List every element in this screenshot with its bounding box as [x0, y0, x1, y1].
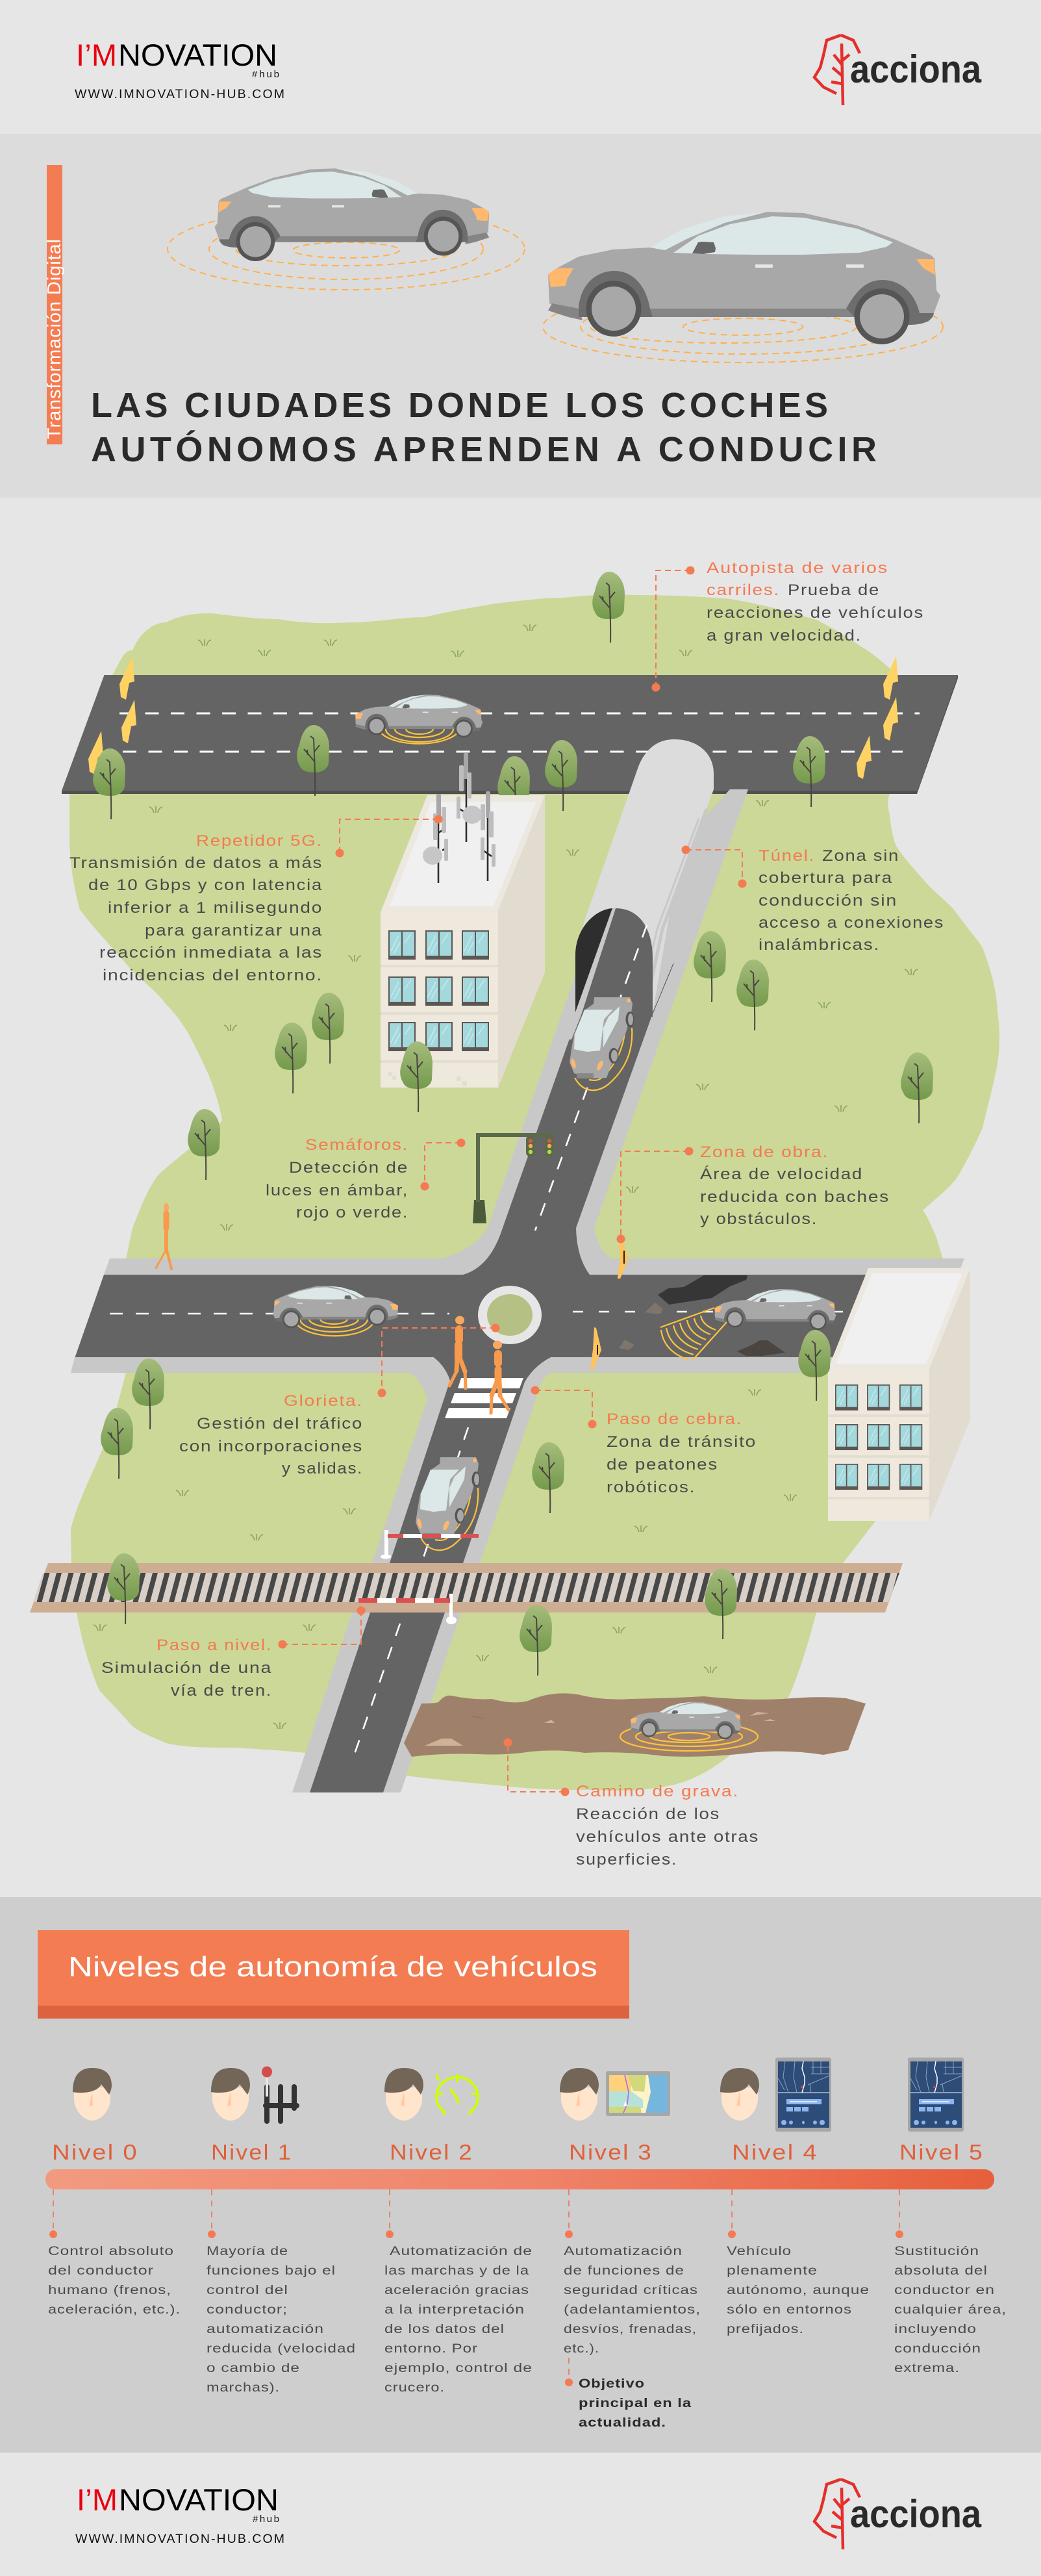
grass tufts	[94, 624, 918, 1729]
roundabout	[478, 1286, 542, 1344]
railway level crossing track	[30, 1563, 903, 1613]
text: level 3: (adelantamientos,	[564, 2303, 701, 2317]
asphalt of crossroad	[75, 908, 909, 1563]
traffic light	[473, 1133, 555, 1223]
callout: gravel road	[504, 1739, 759, 1868]
callout: roundabout: Glorieta.	[284, 1392, 363, 1410]
category tag: Transformación Digital	[44, 239, 65, 439]
icon: level 3 face and map tablet	[560, 2068, 670, 2121]
logo: acciona footer: acciona	[850, 2492, 982, 2536]
road works: pothole and rocks	[619, 1275, 785, 1356]
callout: road works	[617, 1143, 890, 1243]
text: level 5: incluyendo	[894, 2323, 977, 2336]
callout: motorway: Autopista de varios	[707, 559, 888, 577]
callout: gravel road: superficies.	[576, 1851, 677, 1868]
text: level 5: absoluta del	[894, 2264, 988, 2278]
logo: I'MNOVATION header	[75, 38, 284, 101]
building with 5G repeater	[381, 795, 545, 1088]
logo: I'MNOVATION header: I’M	[76, 38, 117, 72]
multi-lane motorway	[62, 675, 958, 794]
callout: zebra crossing: de peatones	[607, 1456, 718, 1473]
callout: road works: Zona de obra.	[700, 1143, 829, 1161]
text: level 3: seguridad críticas	[564, 2284, 698, 2297]
text: level 1: control del	[207, 2284, 288, 2297]
section heading: autonomy levels: Niveles de autonomía de vehículos	[68, 1951, 597, 1983]
callout: road works: reducida con baches	[700, 1188, 890, 1206]
callout: tunnel: Túnel.	[759, 847, 815, 865]
callout: traffic lights: luces en ámbar,	[266, 1182, 408, 1199]
callout: level crossing	[101, 1606, 365, 1700]
text: level 4: Vehículo	[727, 2245, 792, 2258]
text: level 2: aceleración gracias	[384, 2284, 529, 2297]
level labels	[52, 2140, 984, 2164]
map section background	[0, 498, 1041, 1897]
callout: tunnel: inalámbricas.	[759, 936, 880, 954]
callout: zebra crossing	[531, 1386, 757, 1496]
callout: roundabout: Gestión del tráfico	[197, 1415, 363, 1433]
motorway car	[355, 695, 483, 738]
barrier top	[381, 1530, 479, 1559]
text: level 1: reducida (velocidad	[207, 2342, 356, 2356]
callout: motorway	[652, 559, 924, 691]
text: level 0: Control absoluto	[48, 2245, 174, 2258]
callout: motorway: Prueba de	[788, 581, 880, 599]
text: level 3	[564, 2245, 701, 2430]
text: level 0: del conductor	[48, 2264, 154, 2278]
logo: acciona footer	[814, 2479, 982, 2549]
callout: motorway: carriles.	[707, 581, 780, 599]
logo: I'MNOVATION footer: NOVATION	[119, 2482, 279, 2517]
title	[91, 386, 877, 469]
level labels: Nivel 5	[899, 2140, 984, 2164]
text: level 1: Mayoría de	[207, 2245, 288, 2258]
text: level 5: cualquier área,	[894, 2303, 1007, 2317]
text: level 3: actualidad.	[579, 2416, 666, 2430]
callout: level crossing: Paso a nivel.	[157, 1637, 272, 1654]
text: level 4: autónomo, aunque	[727, 2284, 870, 2297]
callout: 5G repeater	[69, 815, 443, 984]
callout: roundabout: con incorporaciones	[179, 1438, 363, 1455]
logo: I'MNOVATION header: WWW.IMNOVATION-HUB.COM	[75, 87, 284, 101]
level labels: Nivel 3	[569, 2140, 653, 2164]
logo: I'MNOVATION header: NOVATION	[118, 38, 277, 72]
callout: gravel road: Camino de grava.	[576, 1783, 739, 1800]
callout: tunnel: acceso a conexiones	[759, 914, 944, 932]
callout: 5G repeater: Repetidor 5G.	[196, 832, 323, 850]
header band	[0, 0, 1041, 134]
text: level 1: conductor;	[207, 2303, 288, 2317]
callout: roundabout	[179, 1324, 500, 1477]
text: level 2: a la interpretación	[384, 2303, 525, 2317]
car approaching crossing	[416, 1457, 481, 1550]
logo: I'MNOVATION footer	[75, 2482, 284, 2546]
car in tunnel	[570, 997, 634, 1090]
logo: acciona header: acciona	[850, 47, 982, 91]
lower road after crossing	[292, 1613, 461, 1792]
callout: tunnel	[682, 846, 944, 954]
level connectors	[49, 2189, 903, 2386]
callout: traffic lights: rojo o verde.	[296, 1204, 408, 1221]
text: level 2: Automatización de	[390, 2245, 533, 2258]
icon: level 0 face	[73, 2068, 112, 2121]
text: level 0: aceleración, etc.).	[48, 2303, 181, 2317]
callout: gravel road: Reacción de los	[576, 1805, 720, 1823]
tunnel	[558, 739, 714, 1039]
callout: traffic lights: Detección de	[289, 1159, 408, 1177]
callout: roundabout: y salidas.	[282, 1460, 363, 1477]
zebra crossing	[445, 1378, 523, 1418]
text: level 5: conductor en	[894, 2284, 995, 2297]
text: level 2: de los datos del	[384, 2323, 505, 2336]
text: level 0	[48, 2245, 181, 2317]
logo: acciona header	[814, 35, 982, 105]
text: level 3: Objetivo	[579, 2377, 645, 2391]
text: level 0: humano (frenos,	[48, 2284, 171, 2297]
logo: I'MNOVATION footer: I’M	[77, 2482, 118, 2517]
tree behind building	[497, 756, 530, 827]
callout: 5G repeater: para garantizar una	[145, 922, 323, 939]
car in road works with sensor fan	[660, 1289, 836, 1360]
callout: 5G repeater: de 10 Gbps y con latencia	[88, 876, 323, 894]
5G antennas	[423, 753, 495, 883]
title band	[0, 134, 1041, 498]
gravel road	[404, 1693, 866, 1757]
title: LAS CIUDADES DONDE LOS COCHES	[91, 386, 828, 425]
callout: motorway: reacciones de vehículos	[707, 604, 924, 622]
text: level 1: funciones bajo el	[207, 2264, 336, 2278]
callout: road works: y obstáculos.	[700, 1210, 818, 1228]
logo: I'MNOVATION footer: #hub	[253, 2514, 279, 2525]
barrier bottom	[358, 1594, 457, 1624]
text: level 4: prefijados.	[727, 2323, 804, 2336]
gradient progress bar	[45, 2169, 994, 2189]
motorway signs	[88, 656, 898, 779]
callout: 5G repeater: Transmisión de datos a más	[69, 854, 323, 872]
robot pedestrian crossing 2	[491, 1341, 508, 1413]
car on the main road with sensor	[273, 1286, 398, 1336]
level labels: Nivel 0	[52, 2140, 138, 2164]
building right	[828, 1268, 970, 1521]
callout: traffic lights: Semáforos.	[305, 1136, 408, 1154]
car on gravel with rings	[620, 1702, 758, 1751]
callout: 5G repeater: incidencias del entorno.	[103, 967, 323, 984]
work signs	[590, 1241, 629, 1370]
text: level 5: conducción	[894, 2342, 981, 2356]
text: level 2	[384, 2245, 533, 2395]
header car left with sensor rings	[168, 168, 525, 290]
callout: gravel road: vehículos ante otras	[576, 1828, 759, 1846]
callout: road works: Área de velocidad	[700, 1166, 863, 1183]
text: level 1: automatización	[207, 2323, 324, 2336]
level labels: Nivel 4	[732, 2140, 818, 2164]
level labels: Nivel 1	[211, 2140, 292, 2164]
callout: level crossing: vía de tren.	[171, 1682, 272, 1700]
callout: zebra crossing: Paso de cebra.	[607, 1410, 742, 1428]
callout: tunnel: conducción sin	[759, 892, 897, 910]
icon: level 5 navigation tablet	[908, 2058, 964, 2132]
callout: motorway: a gran velocidad.	[707, 627, 862, 644]
text: level 2: ejemplo, control de	[384, 2362, 533, 2375]
text: level 2: crucero.	[384, 2381, 445, 2395]
callout: zebra crossing: Zona de tránsito	[607, 1433, 757, 1451]
text: level 3: Automatización	[564, 2245, 683, 2258]
callout: 5G repeater: inferior a 1 milisegundo	[108, 899, 323, 917]
text: level 1	[207, 2245, 356, 2395]
section heading: autonomy levels	[38, 1930, 629, 2019]
trees	[101, 931, 933, 1676]
logo: I'MNOVATION footer: WWW.IMNOVATION-HUB.COM	[75, 2532, 284, 2546]
road centre lines	[110, 925, 857, 1563]
text: level 5: Sustitución	[894, 2245, 979, 2258]
text: level 4: plenamente	[727, 2264, 818, 2278]
trees along the motorway	[93, 572, 825, 819]
callout: 5G repeater: reacción inmediata a las	[99, 944, 323, 962]
callout: traffic lights	[266, 1136, 465, 1221]
level labels: Nivel 2	[390, 2140, 473, 2164]
text: level 5	[894, 2245, 1007, 2375]
logo: I'MNOVATION header: #hub	[252, 69, 279, 80]
green landscape	[69, 594, 999, 1791]
text: level 3: desvíos, frenadas,	[564, 2323, 697, 2336]
robot pedestrian crossing 1	[449, 1316, 466, 1388]
callout: tunnel: Zona sin	[822, 847, 899, 865]
title: AUTÓNOMOS APRENDEN A CONDUCIR	[91, 430, 877, 469]
footer band	[0, 2453, 1041, 2576]
header car right with sensor rings	[543, 212, 943, 363]
pavements of crossroad	[71, 789, 964, 1563]
text: level 2: las marchas y de la	[384, 2264, 529, 2278]
text: level 1: o cambio de	[207, 2362, 300, 2375]
callout: level crossing: Simulación de una	[101, 1659, 272, 1677]
callout: tunnel: cobertura para	[759, 869, 893, 887]
icon: level 4 face and navigation tablet	[720, 2058, 831, 2132]
robot pedestrian left	[156, 1203, 171, 1269]
icon: level 1 face and gear stick	[211, 2066, 297, 2121]
text: level 5: extrema.	[894, 2362, 960, 2375]
text: level 2: entorno. Por	[384, 2342, 478, 2356]
text: level 1: marchas).	[207, 2381, 280, 2395]
icon: level 2 face and cruise gauge	[384, 2068, 478, 2121]
text: level 4: sólo en entornos	[727, 2303, 852, 2317]
text: level 4	[727, 2245, 870, 2336]
callout: zebra crossing: robóticos.	[607, 1479, 696, 1496]
text: level 3: etc.).	[564, 2342, 599, 2356]
levels section background	[0, 1897, 1041, 2453]
text: level 3: principal en la	[579, 2397, 692, 2410]
text: level 3: de funciones de	[564, 2264, 684, 2278]
